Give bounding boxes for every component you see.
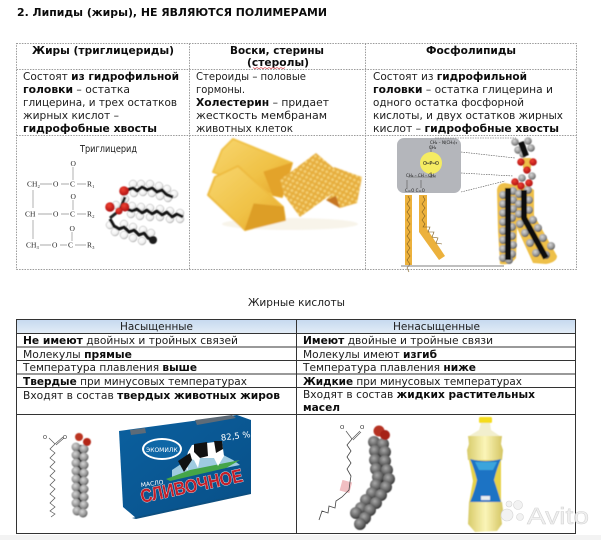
text block: waxes and sterols: гормоны. xyxy=(196,83,245,96)
column heading: waxes xyxy=(230,44,324,69)
diagram: triglyceride formula: CH₂ xyxy=(27,180,40,188)
column: saturated: Насыщенные xyxy=(120,320,193,333)
column: unsaturated: Молекулы имеют изгиб xyxy=(303,348,437,361)
diagram: triglyceride formula: O xyxy=(53,210,59,218)
text block: fats: головки – остатка xyxy=(23,83,130,96)
molecule: unsaturated fatty acid skeletal formula: O xyxy=(360,425,365,431)
column: unsaturated: Температура плавления ниже xyxy=(302,361,476,374)
diagram: triglyceride formula: O xyxy=(53,180,59,188)
text block: phospholipids: одного остатка фосфорной xyxy=(373,96,524,109)
subtitle: fatty acids: Жирные кислоты xyxy=(248,296,345,309)
label: brand name: СЛИВОЧНОЕ xyxy=(139,466,245,508)
image: beeswax blocks and honeycomb xyxy=(208,139,362,230)
molecule: saturated fatty acid skeletal formula xyxy=(43,435,67,517)
column: unsaturated: Жидкие при минусовых температурах xyxy=(303,375,523,388)
column heading: waxes: (стеролы) xyxy=(247,56,309,69)
text block: waxes and sterols: Холестерин – придает xyxy=(196,96,329,109)
diagram: phospholipid structure xyxy=(397,137,557,272)
text block: fats: гидрофобные хвосты xyxy=(23,122,157,135)
text block: phospholipids: Состоят из гидрофильной xyxy=(373,70,527,83)
diagram: triglyceride formula: C xyxy=(70,210,75,218)
diagram: triglyceride formula: C xyxy=(68,240,73,250)
label: butter: МАСЛО xyxy=(140,479,164,489)
column: unsaturated: Входят в состав жидких растительных xyxy=(303,388,535,401)
column: saturated: Температура плавления выше xyxy=(22,361,197,374)
diagram: triglyceride formula xyxy=(25,144,137,250)
title: 2. Липиды (жиры), НЕ ЯВЛЯЮТСЯ ПОЛИМЕРАМИ xyxy=(17,6,327,19)
column: saturated: Молекулы прямые xyxy=(23,348,132,361)
text block: waxes and sterols: Стероиды – половые xyxy=(196,70,306,83)
cow and meadow xyxy=(166,441,240,481)
column heading: waxes: Воски, стерины xyxy=(230,44,324,57)
text block: fats: Состоят из гидрофильной xyxy=(23,70,179,83)
diagram: triglyceride formula: CH₃ xyxy=(26,240,39,250)
logo: ЭКОМИЛК xyxy=(146,447,178,454)
diagram: triglyceride formula: O xyxy=(70,224,76,233)
text block: waxes and sterols xyxy=(196,70,329,135)
column: unsaturated: масел xyxy=(303,401,340,414)
text block: waxes and sterols: жесткость мембранам xyxy=(196,109,327,122)
strips: hydrophobic tails diagram xyxy=(401,195,504,272)
panel: hydrophilic head diagram: C=O C=O xyxy=(405,188,425,193)
panel: hydrophilic head diagram xyxy=(397,138,461,193)
molecule: saturated fatty acid skeletal formula: O xyxy=(43,435,47,441)
molecule: saturated fatty acid space-filling model xyxy=(72,433,91,518)
panel: hydrophilic head diagram: CH₂ xyxy=(429,145,437,150)
diagram: triglyceride formula: O xyxy=(52,240,58,250)
diagram: triglyceride formula: CH xyxy=(25,210,36,218)
text block: phospholipids: кислот – гидрофобные хвосты xyxy=(373,122,559,135)
text block: fats: жирных кислот – xyxy=(23,109,119,122)
column: unsaturated: Ненасыщенные xyxy=(393,320,480,333)
text block: waxes and sterols: животных клеток xyxy=(196,122,293,135)
label: fat content: 82,5 % xyxy=(220,430,251,444)
molecule: phospholipid space-filling model xyxy=(497,137,557,264)
diagram: triglyceride formula: R₃ xyxy=(87,240,95,250)
column: saturated: Не имеют двойных и тройных связей xyxy=(23,334,238,347)
image: sunflower oil bottle xyxy=(467,417,503,532)
diagram: triglyceride formula: C xyxy=(70,180,75,188)
molecule: unsaturated fatty acid skeletal formula: O xyxy=(340,425,345,431)
molecule: saturated fatty acid skeletal formula: O xyxy=(63,435,67,441)
molecule: triglyceride space-filling model xyxy=(105,180,184,245)
column: saturated xyxy=(22,320,280,402)
text block: fats xyxy=(23,70,179,135)
column heading: phospholipids: Фосфолипиды xyxy=(426,44,516,57)
column: unsaturated xyxy=(302,320,535,414)
molecule: unsaturated fatty acid skeletal formula xyxy=(319,425,365,520)
molecule: unsaturated fatty acid space-filling model xyxy=(350,426,395,530)
text block: phospholipids xyxy=(373,70,564,135)
column: saturated: Твердые при минусовых температурах xyxy=(23,375,248,388)
text block: fats: глицерина, и трех остатков xyxy=(23,96,177,109)
diagram: triglyceride formula: R₁ xyxy=(87,180,95,188)
diagram: triglyceride formula: Триглицерид xyxy=(79,144,137,155)
panel: hydrophilic head diagram: O–P–O xyxy=(423,161,439,167)
watermark: Avito: Avito xyxy=(527,503,589,529)
text block: phospholipids: головки – остатка глицерина и xyxy=(373,83,553,96)
table: fatty acids xyxy=(16,320,576,534)
column: unsaturated: Имеют двойные и тройные связи xyxy=(303,334,493,347)
diagram: triglyceride formula: O xyxy=(70,192,76,201)
panel: hydrophilic head diagram: CH₂ – N(CH₃)₃ xyxy=(430,140,457,145)
diagram: triglyceride formula: R₂ xyxy=(87,210,95,218)
column: saturated: Входят в состав твердых животных жиров xyxy=(23,389,280,402)
watermark: Avito xyxy=(501,500,589,529)
panel: hydrophilic head diagram: CH₂ – CH – CH₂ xyxy=(406,173,436,178)
text block: phospholipids: кислоты, и двух остатков жирных xyxy=(373,109,564,122)
column heading: fats: Жиры (триглицериды) xyxy=(32,44,174,57)
diagram: triglyceride formula: O xyxy=(70,159,76,168)
image: butter package xyxy=(119,415,251,519)
